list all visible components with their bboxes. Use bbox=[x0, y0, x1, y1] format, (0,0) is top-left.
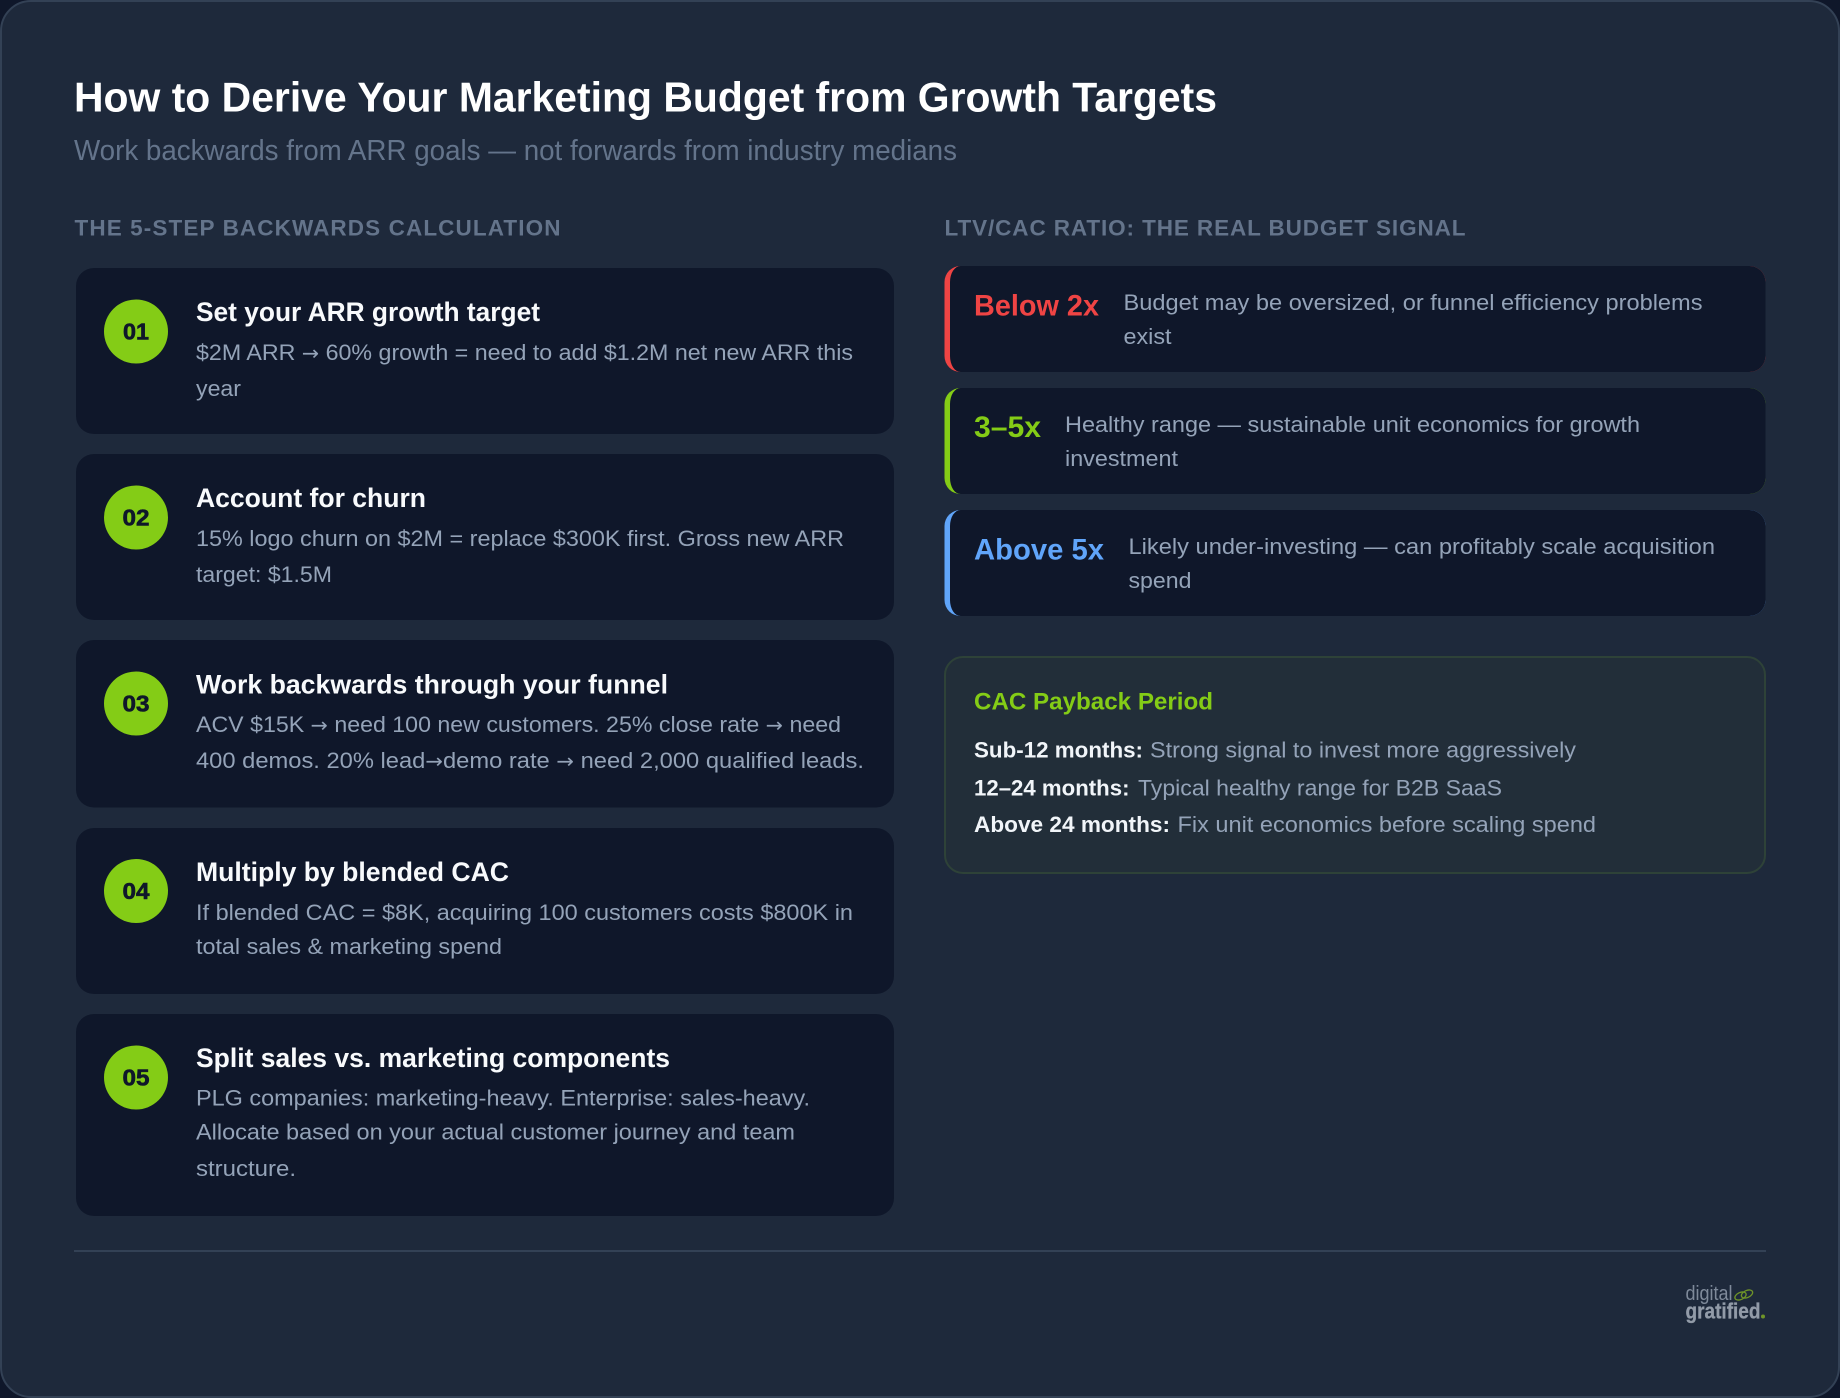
step 01 description bbox=[196, 340, 853, 401]
panel: CAC payback period bbox=[945, 657, 1765, 873]
below 2x description: Budget may be oversized, or funnel efficiency problems bbox=[1124, 290, 1702, 315]
icon: chain link bbox=[1734, 1288, 1754, 1302]
3-5x description: Healthy range — sustainable unit economics for growth bbox=[1065, 412, 1640, 437]
payback row: 12-24 months: 12–24 months: bbox=[974, 776, 1130, 800]
step 04 description bbox=[196, 900, 853, 959]
step 05 heading: Split sales vs. marketing components bbox=[196, 1043, 670, 1073]
panel: step 02 bbox=[76, 454, 894, 620]
step 04 description: If blended CAC = $8K, acquiring 100 customers costs $800K in bbox=[196, 900, 853, 925]
step 02 description: target: $1.5M bbox=[196, 562, 332, 587]
step 02 description: 15% logo churn on $2M = replace $300K first. Gross new ARR bbox=[196, 526, 844, 551]
above 5x description bbox=[1128, 534, 1715, 593]
heading: 5-step calculation: THE 5-STEP BACKWARDS CALCULATION bbox=[74, 216, 560, 240]
above 5x description: spend bbox=[1128, 568, 1192, 593]
title: How to Derive Your Marketing Budget from Growth Targets bbox=[74, 74, 1217, 120]
3-5x label: 3–5x bbox=[974, 411, 1041, 444]
panel: step 03 bbox=[76, 640, 894, 808]
step 03 description bbox=[196, 712, 864, 773]
above 5x description: Likely under-investing — can profitably scale acquisition bbox=[1128, 534, 1715, 559]
payback row: sub-12 months: Strong signal to invest more aggressively bbox=[1150, 738, 1577, 762]
payback row: 12-24 months bbox=[974, 776, 1502, 800]
logo: digital gratified: gratified bbox=[1686, 1298, 1760, 1324]
below 2x label: Below 2x bbox=[974, 290, 1099, 322]
step 02 description bbox=[196, 526, 844, 587]
step 05 description: PLG companies: marketing-heavy. Enterprise: sales-heavy. bbox=[196, 1086, 810, 1110]
payback row: sub-12 months bbox=[974, 738, 1577, 762]
step 01 description: year bbox=[196, 376, 242, 401]
heading: LTV/CAC ratio: LTV/CAC RATIO: THE REAL BUDGET SIGNAL bbox=[944, 216, 1466, 240]
step 05 description: structure. bbox=[196, 1156, 296, 1181]
step 04 badge bbox=[104, 859, 168, 923]
logo: digital gratified bbox=[1686, 1283, 1765, 1324]
above 5x label: Above 5x bbox=[974, 534, 1104, 566]
step 01 heading: Set your ARR growth target bbox=[196, 297, 540, 327]
panel: step 01 bbox=[76, 268, 894, 434]
step 02 heading: Account for churn bbox=[196, 483, 426, 513]
logo: digital gratified: digital bbox=[1686, 1283, 1732, 1305]
step 04 badge: 04 bbox=[122, 878, 150, 904]
step 05 description: Allocate based on your actual customer journey and team bbox=[196, 1120, 795, 1144]
step 01 badge bbox=[104, 300, 168, 364]
payback heading: CAC Payback Period bbox=[974, 688, 1213, 716]
step 03 description: 400 demos. 20% lead →demo rate → need 2,000 qualified leads. bbox=[196, 748, 864, 773]
step 02 badge bbox=[104, 486, 168, 550]
below 2x description bbox=[1124, 290, 1702, 349]
panel: above 5x bbox=[944, 510, 1766, 616]
payback row: sub-12 months: Sub-12 months: bbox=[974, 738, 1143, 762]
panel: step 05 bbox=[76, 1014, 894, 1216]
step 01 badge: 01 bbox=[123, 318, 149, 344]
step 04 heading: Multiply by blended CAC bbox=[196, 857, 509, 887]
payback row: above 24 months bbox=[974, 812, 1596, 837]
step 05 description bbox=[196, 1086, 810, 1181]
payback row: above 24 months: Fix unit economics before scaling spend bbox=[1178, 812, 1596, 837]
step 02 badge: 02 bbox=[122, 504, 150, 530]
below 2x description: exist bbox=[1124, 324, 1172, 349]
step 05 badge bbox=[104, 1046, 168, 1110]
step 01 description: $2M ARR → 60% growth = need to add $1.2M net new ARR this bbox=[196, 340, 853, 365]
3-5x description: investment bbox=[1065, 446, 1179, 471]
panel: 3-5x bbox=[944, 388, 1766, 494]
step 03 description: ACV $15K → need 100 new customers. 25% close rate → need bbox=[196, 712, 841, 737]
payback row: above 24 months: Above 24 months: bbox=[974, 812, 1170, 837]
panel: below 2x bbox=[944, 266, 1766, 372]
step 03 heading: Work backwards through your funnel bbox=[196, 670, 668, 700]
3-5x description bbox=[1065, 412, 1640, 471]
step 03 badge bbox=[104, 672, 168, 736]
subtitle: Work backwards from ARR goals — not forwards from industry medians bbox=[74, 135, 957, 167]
step 05 badge: 05 bbox=[122, 1064, 150, 1090]
step 03 badge: 03 bbox=[122, 690, 150, 716]
payback row: 12-24 months: Typical healthy range for B2B SaaS bbox=[1138, 776, 1502, 800]
panel: step 04 bbox=[76, 828, 894, 994]
step 04 description: total sales & marketing spend bbox=[196, 934, 502, 959]
